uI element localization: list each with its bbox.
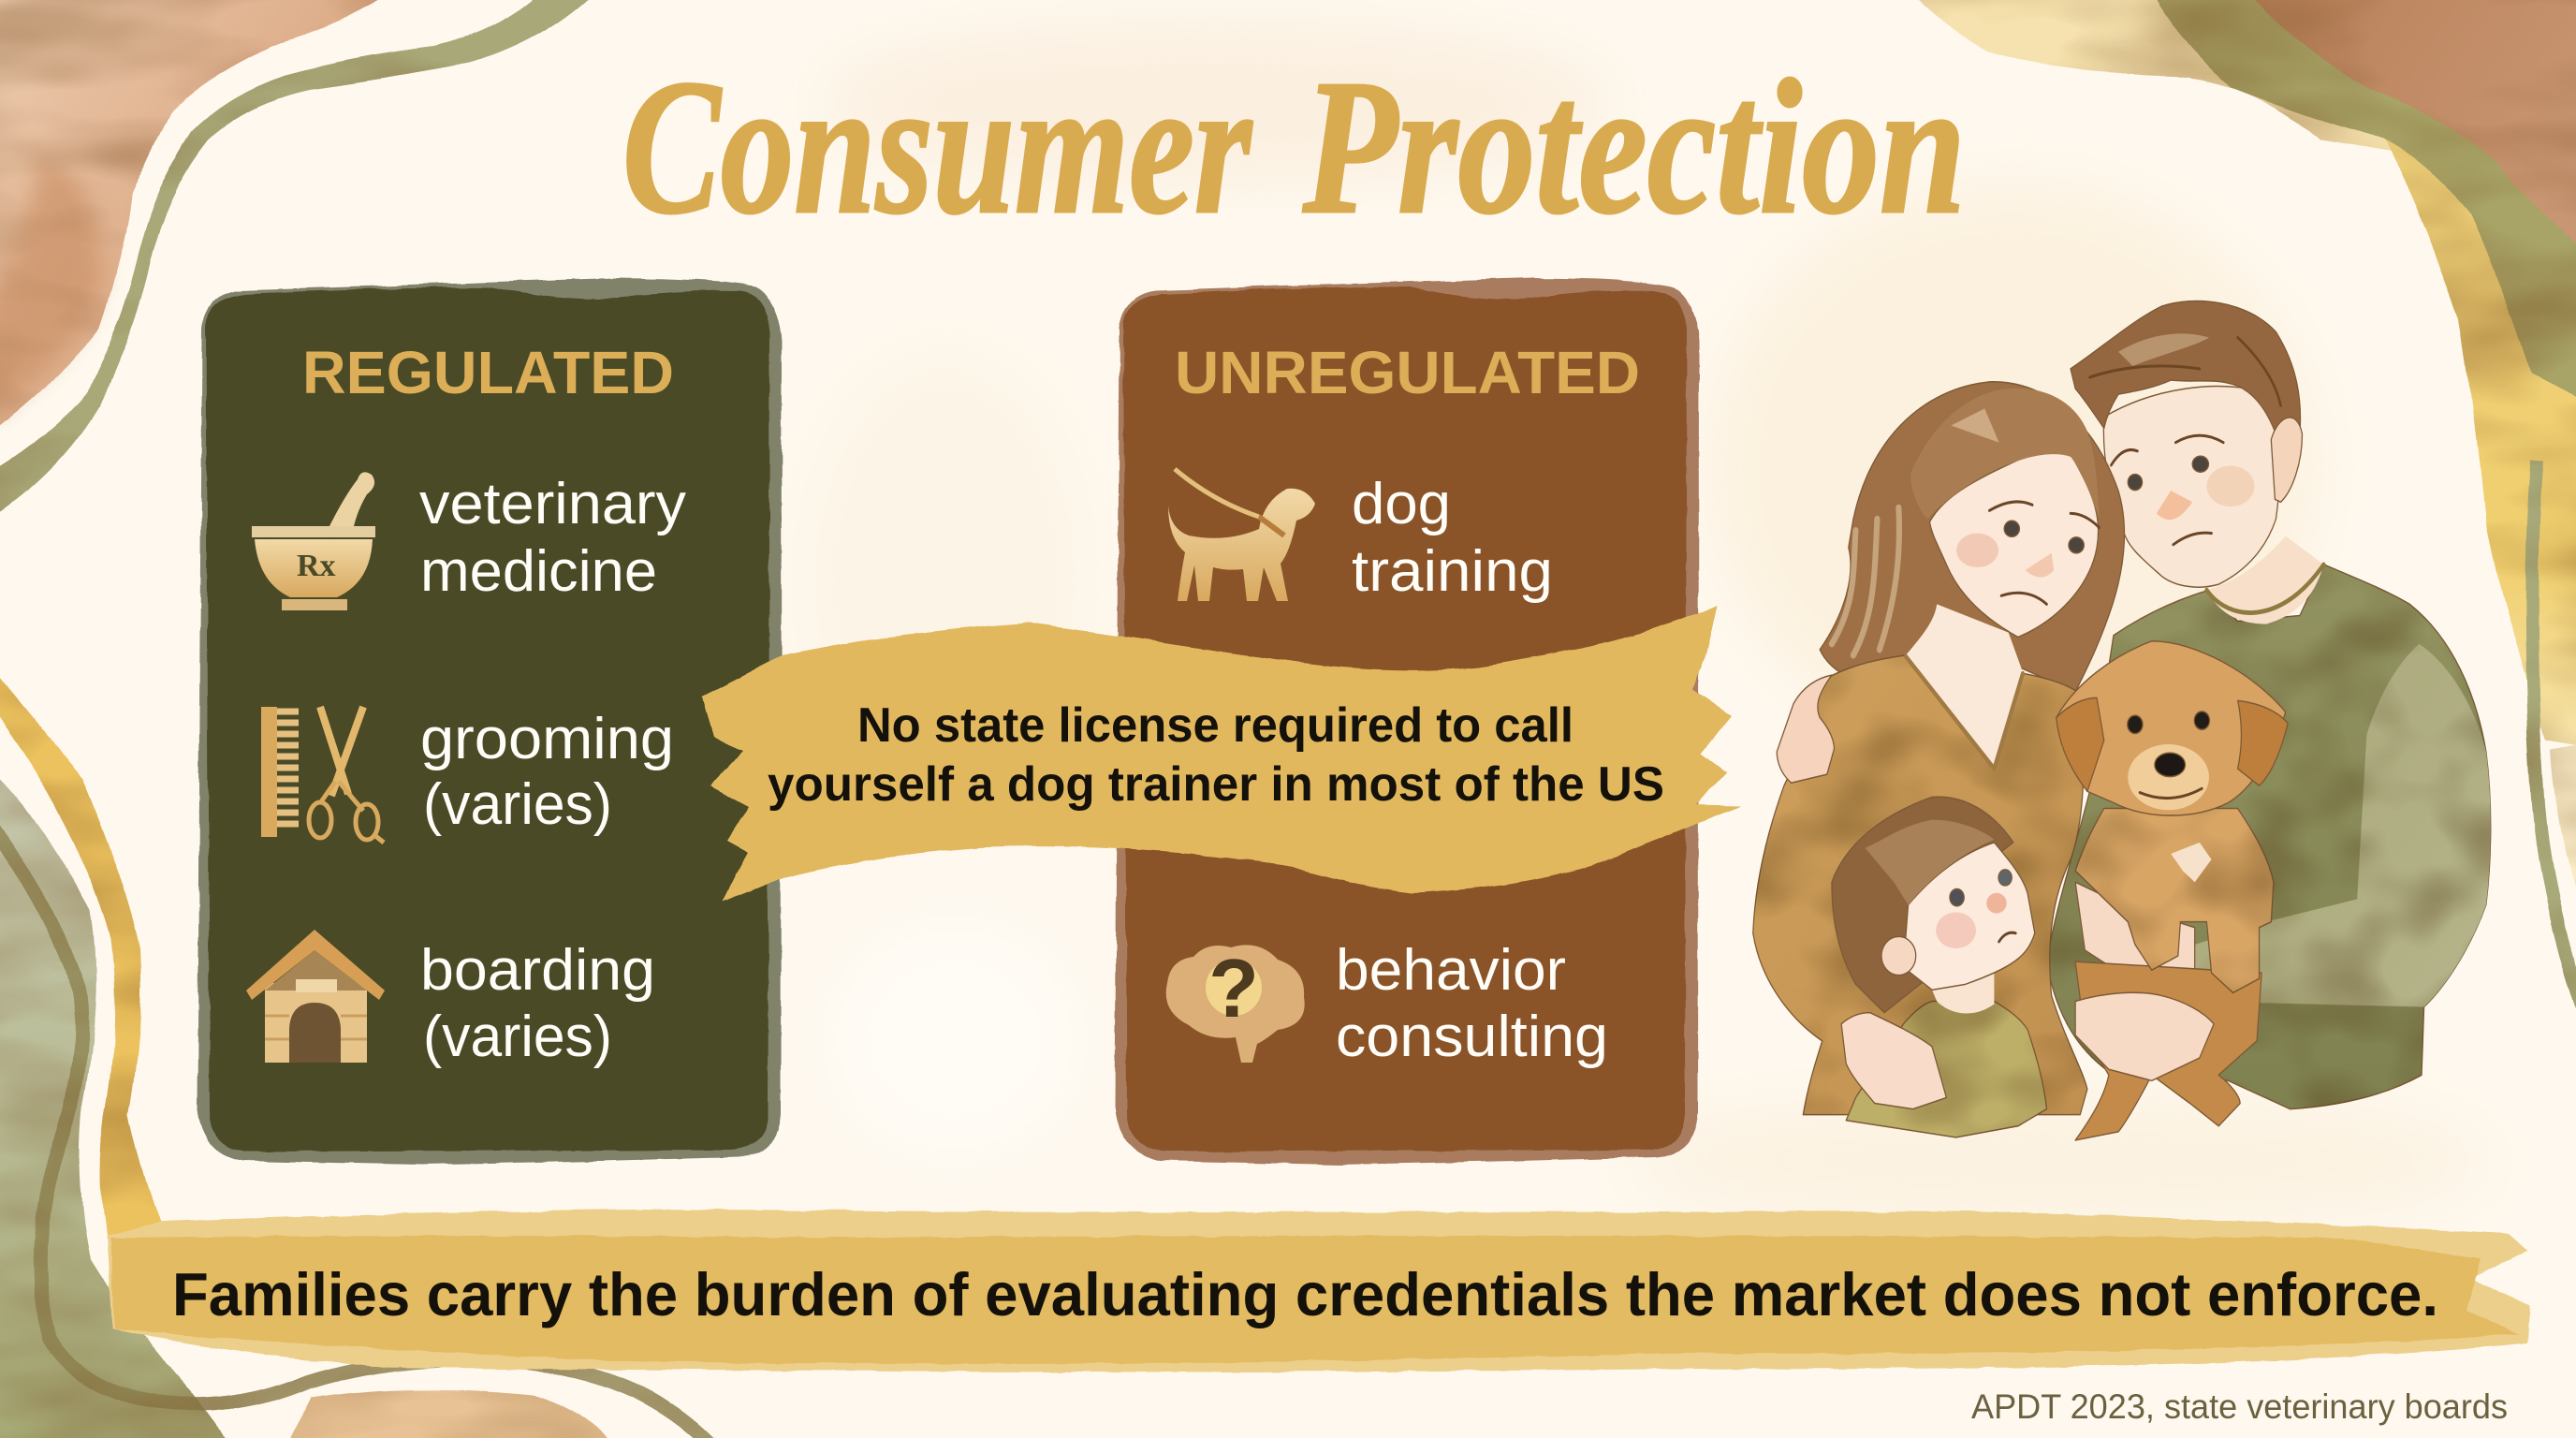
panel: regulated bbox=[198, 278, 782, 1165]
panel: unregulated bbox=[1115, 278, 1699, 1165]
callout text: No state license required to call bbox=[857, 698, 1573, 753]
callout ribbon bbox=[702, 605, 1741, 902]
watercolor wash: top left bbox=[0, 0, 604, 524]
label: boarding: boarding bbox=[420, 938, 655, 1003]
icon: mortar and pestle: Rx bbox=[297, 549, 336, 583]
label: behavior consulting bbox=[1336, 938, 1608, 1069]
callout text: yourself a dog trainer in most of the US bbox=[768, 757, 1664, 812]
callout text bbox=[768, 698, 1664, 812]
icon: dog house bbox=[246, 930, 385, 1063]
label: veterinary medicine: medicine bbox=[420, 539, 657, 604]
icon: mortar and pestle bbox=[252, 472, 375, 610]
label: behavior consulting: consulting bbox=[1336, 1005, 1608, 1069]
icon: brain with question mark bbox=[1166, 942, 1305, 1063]
label: veterinary medicine: veterinary bbox=[419, 472, 686, 536]
label: dog training: training bbox=[1352, 539, 1553, 604]
icon: dog on leash bbox=[1168, 469, 1315, 601]
icon: brain with question mark: ? bbox=[1208, 942, 1259, 1034]
woman bbox=[1753, 382, 2124, 1115]
illustration: worried family with puppy bbox=[1753, 301, 2491, 1140]
watercolor wash: top right bbox=[1900, 0, 2576, 1058]
label: veterinary medicine bbox=[419, 472, 686, 604]
bottom banner bbox=[107, 1210, 2529, 1372]
icon: comb and scissors bbox=[261, 707, 384, 843]
label: boarding bbox=[420, 938, 655, 1069]
label: behavior consulting: behavior bbox=[1336, 938, 1566, 1003]
source note: APDT 2023, state veterinary boards bbox=[1971, 1387, 2508, 1426]
man bbox=[2047, 301, 2491, 1109]
label: boarding: (varies) bbox=[423, 1005, 612, 1069]
label: grooming bbox=[420, 707, 674, 837]
label: grooming: grooming bbox=[420, 707, 674, 771]
puppy and man's hands bbox=[2056, 641, 2288, 1140]
watercolor wash: bottom left bbox=[0, 655, 723, 1438]
banner text: Families carry the burden of evaluating credentials the market does not enforce. bbox=[172, 1260, 2438, 1328]
title bbox=[622, 39, 1966, 254]
label: dog training bbox=[1352, 472, 1553, 604]
title: Consumer bbox=[622, 39, 1252, 254]
heading: unregulated: UNREGULATED bbox=[1175, 339, 1640, 406]
heading: regulated: REGULATED bbox=[302, 339, 674, 406]
title: Protection bbox=[1302, 39, 1966, 254]
child bbox=[1832, 797, 2047, 1137]
label: grooming: (varies) bbox=[423, 772, 612, 837]
label: dog training: dog bbox=[1352, 472, 1451, 536]
